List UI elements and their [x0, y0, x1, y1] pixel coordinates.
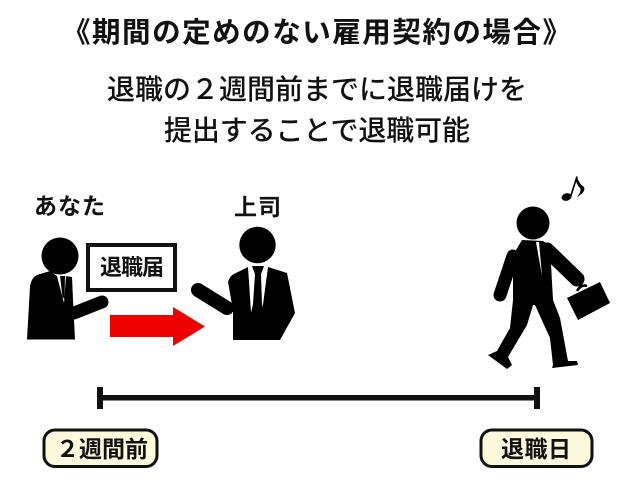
icon: walking figure with briefcase [488, 206, 610, 369]
badge: resignation date [481, 430, 592, 466]
subtitle [107, 74, 527, 146]
icon: boss figure [198, 227, 295, 340]
label: you: あなた [34, 193, 105, 219]
icon: you figure [27, 238, 102, 340]
document: resignation letter: 退職届 [100, 255, 164, 280]
document: resignation letter [88, 245, 175, 290]
label: boss: 上司 [234, 194, 281, 220]
badge: two weeks before [44, 430, 157, 466]
title: 《期間の定めのない雇用契約の場合》 [62, 17, 571, 49]
timeline [97, 387, 540, 409]
badge: two weeks before: ２週間前 [56, 436, 148, 462]
badge: resignation date: 退職日 [501, 436, 571, 462]
icon: music note [561, 176, 584, 202]
arrow: submit to boss [110, 307, 205, 346]
subtitle: 提出することで退職可能 [164, 115, 470, 146]
subtitle: 退職の２週間前までに退職届けを [107, 74, 527, 105]
